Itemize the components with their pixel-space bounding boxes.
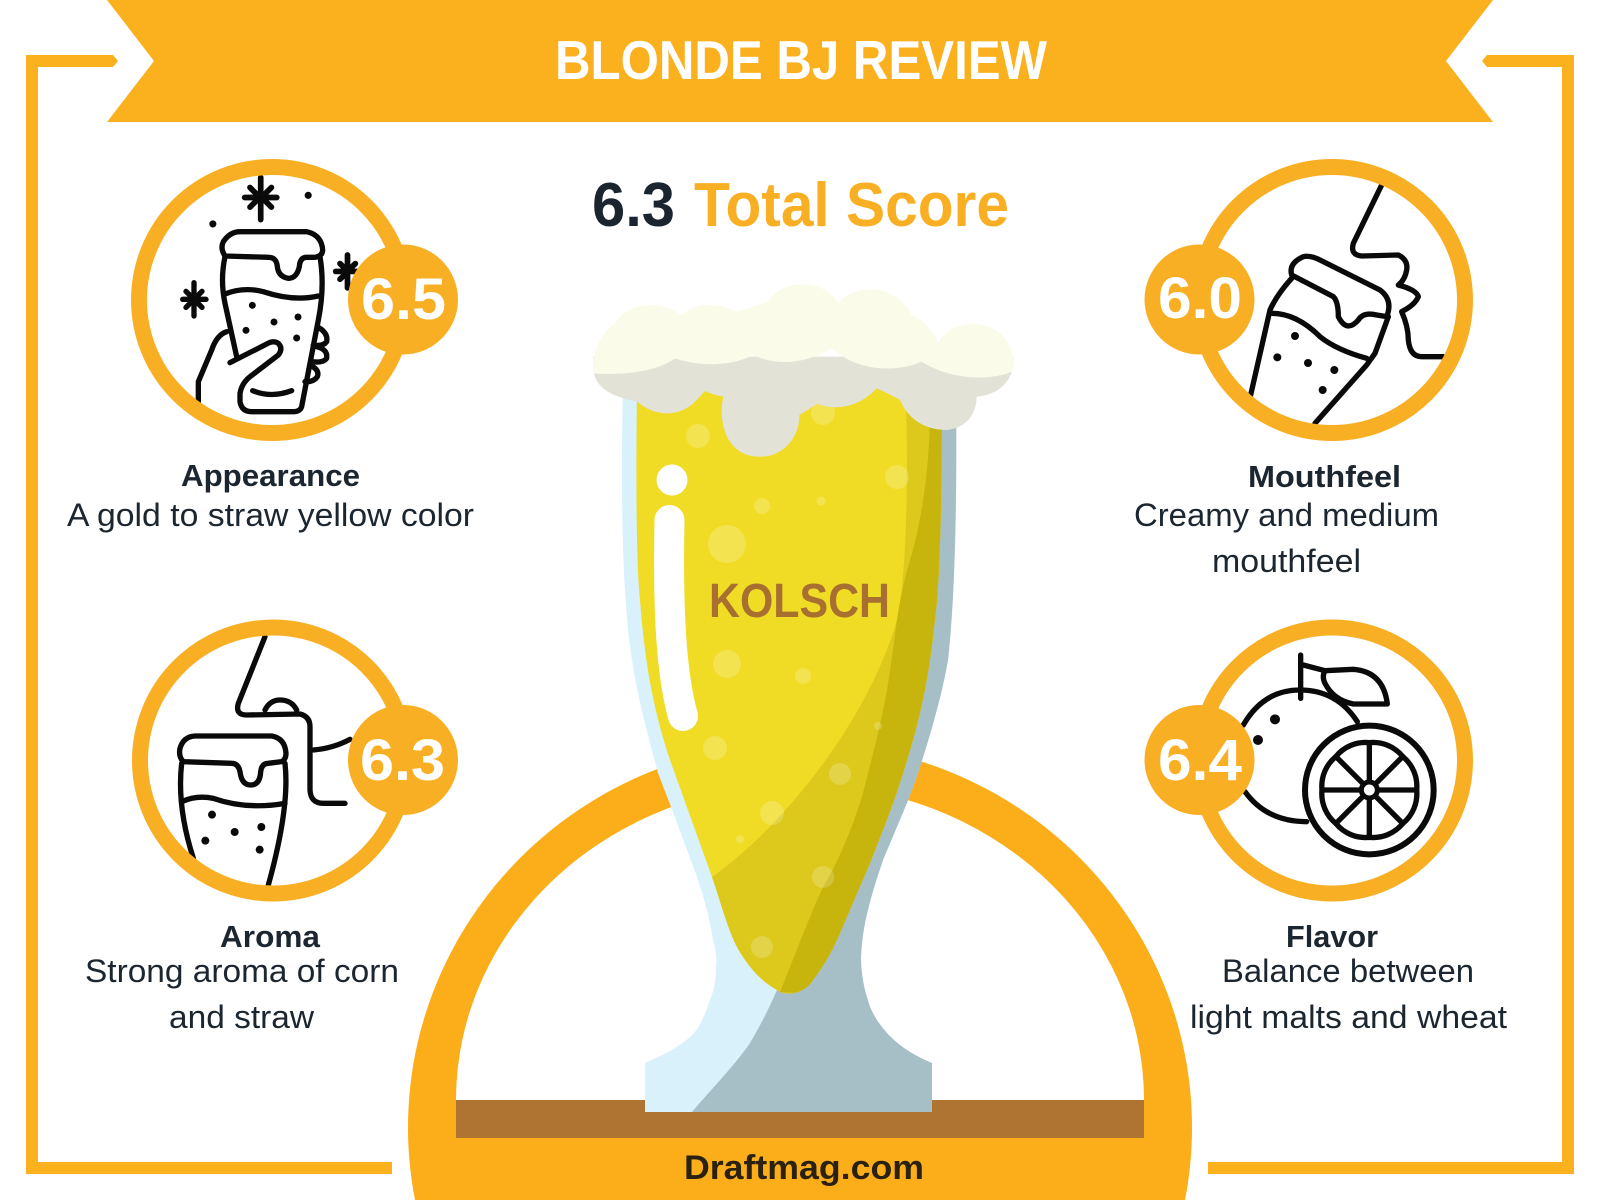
panel: mouthfeel [1134,167,1465,579]
panel: aroma [85,628,458,1035]
title: BLONDE BJ REVIEW [555,29,1047,91]
total score heading: 6.3 [592,171,675,240]
score badge [348,244,458,354]
icon: citrus fruit [1243,655,1434,854]
label: Appearance [181,458,360,493]
arch and shelf [408,743,1192,1200]
description: Creamy and medium [1134,497,1439,533]
description [1134,497,1439,579]
description [85,953,399,1035]
score badge: 6.4 [1158,728,1242,793]
panel: appearance [67,167,474,533]
score badge [1144,244,1254,354]
icon: beer in hand [183,177,359,412]
score badge: 6.5 [361,267,446,332]
label: Flavor [1286,919,1378,954]
score badge: 6.3 [360,728,445,793]
icon: beer and mouth [1251,185,1443,423]
foam top [593,284,1013,378]
description: Strong aroma of corn [85,953,399,989]
score badge [348,705,458,815]
panel: flavor [1144,628,1507,1035]
glass highlight [656,464,688,716]
ring [1199,628,1465,894]
ring [139,167,405,433]
description [1190,953,1507,1035]
foam shadow [593,357,1013,457]
description: light malts and wheat [1190,999,1507,1035]
score badge [1144,705,1254,815]
bubbles [686,401,909,958]
icon: beer and nose [180,637,350,885]
label: Mouthfeel [1248,459,1401,494]
total score heading: Total Score [694,171,1009,240]
website credit: Draftmag.com [684,1149,924,1187]
ring [140,628,406,894]
description: and straw [169,999,315,1035]
title banner [107,0,1493,122]
beer style label: KOLSCH [709,575,890,628]
label: Aroma [220,919,321,954]
glass body [622,380,956,1112]
description: mouthfeel [1212,543,1361,579]
description: Balance between [1222,953,1474,989]
score badge: 6.0 [1158,266,1242,331]
beer [636,388,942,994]
ring [1199,167,1465,433]
description: A gold to straw yellow color [67,497,474,533]
beer glass illustration [593,284,1013,1112]
